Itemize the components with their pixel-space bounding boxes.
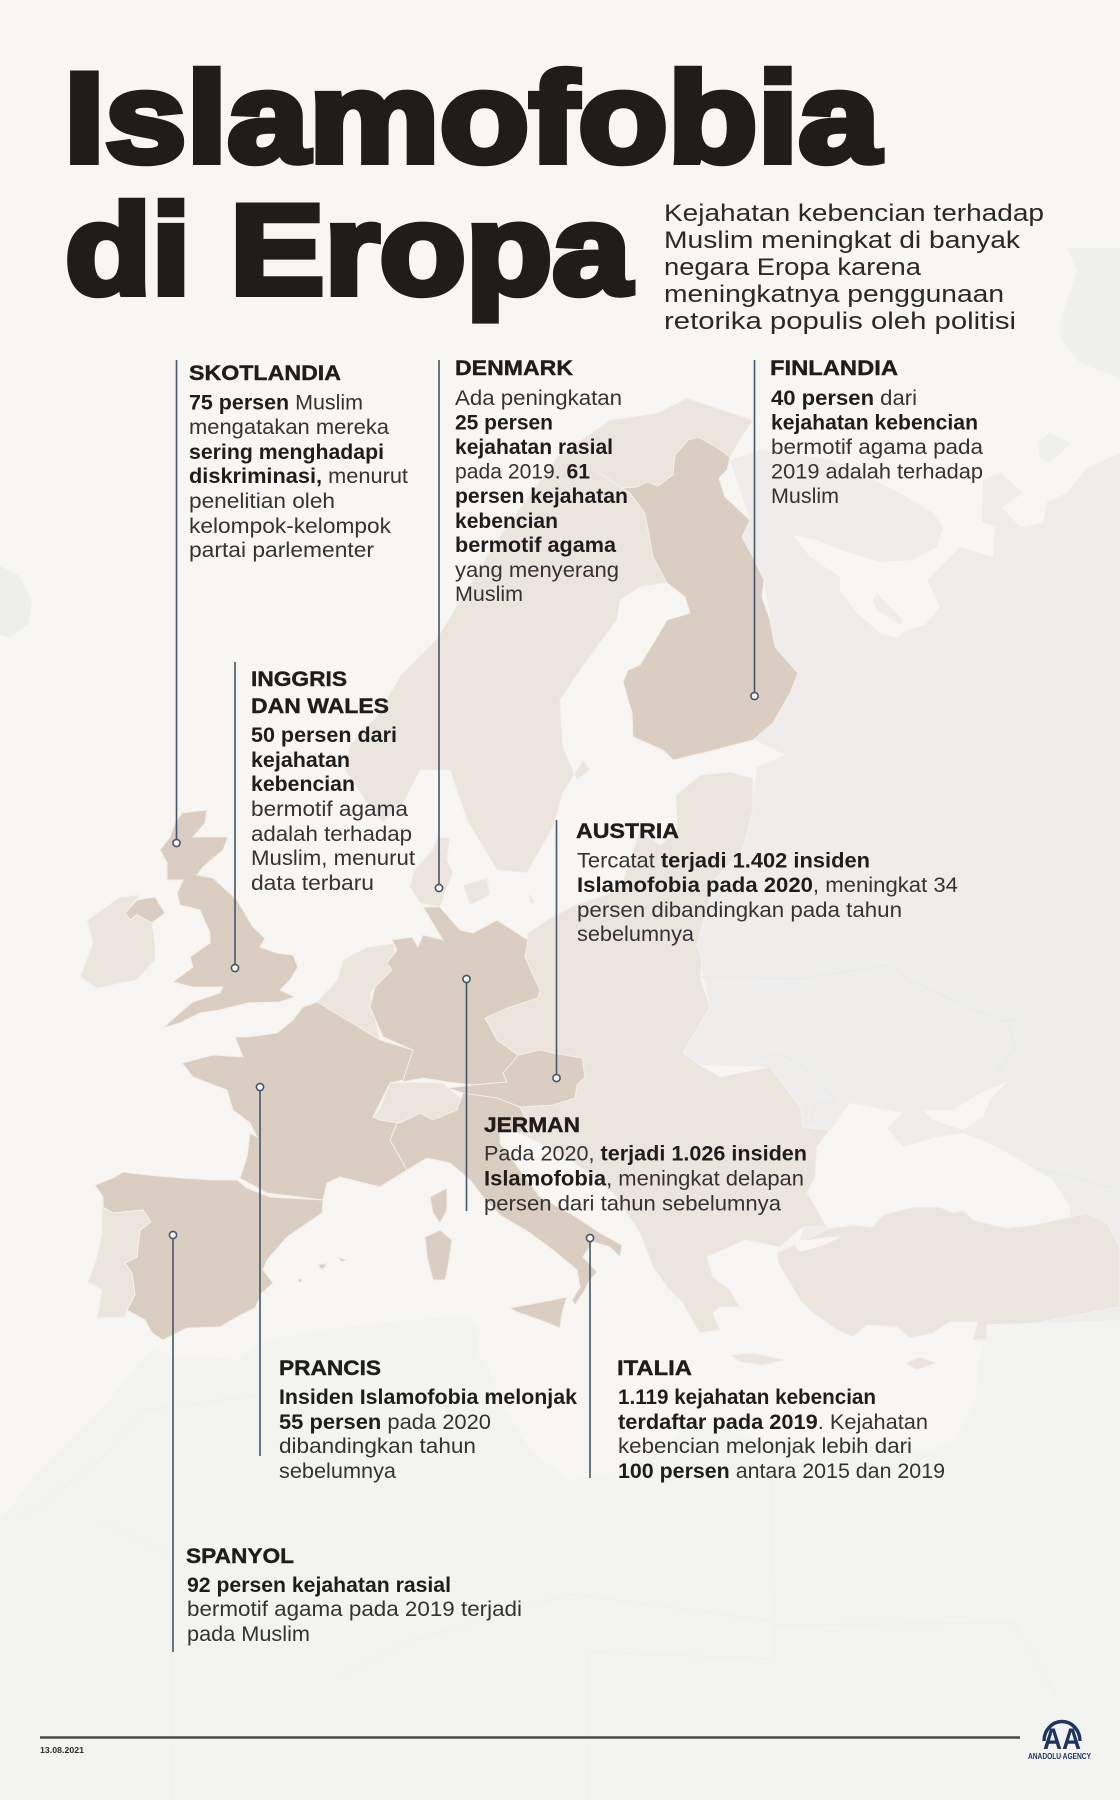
callout: Denmark: kejahatan rasial <box>455 436 613 459</box>
title <box>64 47 881 322</box>
callout: Denmark: bermotif agama <box>455 534 616 557</box>
callout: Skotlandia: mengatakan mereka <box>189 416 389 439</box>
callout: Prancis: 55 persen pada 2020 <box>279 1411 491 1434</box>
map: Germany <box>370 907 540 1085</box>
map: North Africa and Middle East <box>0 1307 1120 1800</box>
map: Portugal <box>88 1207 151 1318</box>
callout: Spanyol: bermotif agama pada 2019 terjadi <box>187 1598 522 1621</box>
callout: Skotlandia: partai parlementer <box>189 539 374 562</box>
map: Italy <box>390 1093 622 1328</box>
subtitle: Muslim meningkat di banyak <box>664 227 1021 254</box>
callout: Skotlandia: 75 persen Muslim <box>189 392 363 414</box>
callout: Inggris dan Wales: adalah terhadap <box>251 823 412 846</box>
callout: Austria: Tercatat terjadi 1.402 insiden <box>577 850 870 872</box>
callout: Finlandia: 2019 adalah terhadap <box>771 460 983 484</box>
subtitle <box>664 200 1044 335</box>
callout: Inggris dan Wales: DAN WALES <box>251 694 389 718</box>
callout: Finlandia: FINLANDIA <box>770 356 898 380</box>
callout: Inggris dan Wales: kejahatan <box>251 749 350 772</box>
callout: Austria <box>553 819 958 1082</box>
callout: Jerman: Islamofobia , meningkat delapan <box>484 1168 804 1190</box>
callout: Austria: persen dibandingkan pada tahun <box>577 899 902 922</box>
callout: Jerman: persen dari tahun sebelumnya <box>484 1192 781 1216</box>
subtitle: meningkatnya penggunaan <box>664 281 1004 308</box>
map: Ireland <box>80 895 155 988</box>
map: Russia and eastern neighbours <box>0 248 1120 1325</box>
map: Spain <box>95 1172 347 1340</box>
callout: Denmark: yang menyerang <box>455 559 619 582</box>
map: Austria <box>447 1050 585 1107</box>
callout: Inggris dan Wales: INGGRIS <box>251 667 347 691</box>
callout: Jerman: JERMAN <box>484 1113 580 1137</box>
subtitle: negara Eropa karena <box>664 254 921 281</box>
callout: Prancis: PRANCIS <box>279 1356 381 1380</box>
subtitle: Kejahatan kebencian terhadap <box>664 200 1044 227</box>
callout: Italia: ITALIA <box>617 1356 692 1380</box>
callout: Spanyol <box>169 1231 522 1652</box>
callout: Denmark: kebencian <box>455 510 558 533</box>
map: France <box>182 1002 413 1200</box>
callout: Italia <box>586 1234 945 1483</box>
callout: Skotlandia: penelitian oleh <box>189 490 335 513</box>
callout: Inggris dan Wales: Muslim, menurut <box>251 847 415 870</box>
subtitle: retorika populis oleh politisi <box>664 308 1016 335</box>
map: Finland <box>597 437 798 760</box>
callout: Denmark: DENMARK <box>455 356 574 380</box>
callout: Skotlandia: kelompok-kelompok <box>189 515 392 538</box>
callout: Denmark: persen kejahatan <box>455 485 628 508</box>
callout: Skotlandia: diskriminasi, menurut <box>189 465 408 488</box>
callout: Spanyol: 92 persen kejahatan rasial <box>187 1574 451 1597</box>
callout: Prancis <box>256 1083 577 1483</box>
callout: Denmark <box>435 356 628 892</box>
map: Norway and Sweden <box>345 398 753 873</box>
callout: Italia: 100 persen antara 2015 dan 2019 <box>618 1460 945 1483</box>
title: di Eropa <box>65 179 632 322</box>
callout: Inggris dan Wales: data terbaru <box>251 872 374 895</box>
callout: Finlandia: 40 persen dari <box>771 387 917 410</box>
callout: Jerman <box>463 975 807 1216</box>
map: Crete and Cyprus <box>730 1353 937 1370</box>
title: Islamofobia <box>64 47 881 190</box>
callout: Austria: Islamofobia pada 2020 , meningkat 34 <box>577 874 958 897</box>
map: Baltics, Poland, Central and South-East Europe <box>485 772 830 1333</box>
callout: Austria: AUSTRIA <box>576 819 679 843</box>
callout: Finlandia: Muslim <box>771 485 839 508</box>
callout: Italia: kebencian melonjak lebih dari <box>618 1435 912 1458</box>
callout: Skotlandia: SKOTLANDIA <box>189 361 341 385</box>
callout: Prancis: sebelumnya <box>279 1460 396 1483</box>
callout: Inggris dan Wales: kebencian <box>251 773 355 796</box>
callout: Austria: sebelumnya <box>577 923 694 946</box>
rivers and borders <box>700 964 1120 1190</box>
map: Benelux <box>317 943 395 1040</box>
icon: Anadolu Agency logo: ANADOLU AGENCY <box>1028 1752 1092 1761</box>
callout: Skotlandia <box>173 360 408 847</box>
callout: Finlandia: kejahatan kebencian <box>771 412 978 434</box>
callout: Denmark: 25 persen <box>455 412 553 434</box>
callout: Finlandia: bermotif agama pada <box>771 436 983 459</box>
callout: Italia: 1.119 kejahatan kebencian <box>618 1386 876 1409</box>
callout: Skotlandia: sering menghadapi <box>189 441 384 464</box>
callout: Inggris dan Wales: bermotif agama <box>251 798 408 821</box>
map: Switzerland <box>373 1082 463 1123</box>
callout: Denmark: pada 2019. 61 <box>455 460 590 484</box>
callout: Denmark: Ada peningkatan <box>455 387 622 410</box>
map: United Kingdom <box>125 810 298 1028</box>
map: Black Sea and Azov <box>807 1082 1070 1232</box>
callout: Inggris dan Wales: 50 persen dari <box>251 724 397 747</box>
map: Denmark <box>410 837 535 907</box>
callout: Jerman: Pada 2020, terjadi 1.026 insiden <box>484 1142 807 1166</box>
map: Turkey <box>777 1207 1120 1340</box>
callout: Prancis: Insiden Islamofobia melonjak <box>279 1386 577 1409</box>
date: 13.08.2021 <box>40 1746 85 1755</box>
footer rule <box>40 1736 1020 1739</box>
callout: Spanyol: SPANYOL <box>186 1544 294 1568</box>
icon: Anadolu Agency logo: AA <box>1043 1723 1081 1756</box>
callout: Inggris dan Wales <box>231 662 415 972</box>
icon: Anadolu Agency logo <box>1028 1722 1092 1761</box>
callout: Finlandia <box>751 356 983 700</box>
callout: Prancis: dibandingkan tahun <box>279 1435 476 1458</box>
callout: Denmark: Muslim <box>455 583 523 606</box>
callout: Italia: terdaftar pada 2019 . Kejahatan <box>618 1411 928 1434</box>
callout: Spanyol: pada Muslim <box>187 1623 310 1646</box>
